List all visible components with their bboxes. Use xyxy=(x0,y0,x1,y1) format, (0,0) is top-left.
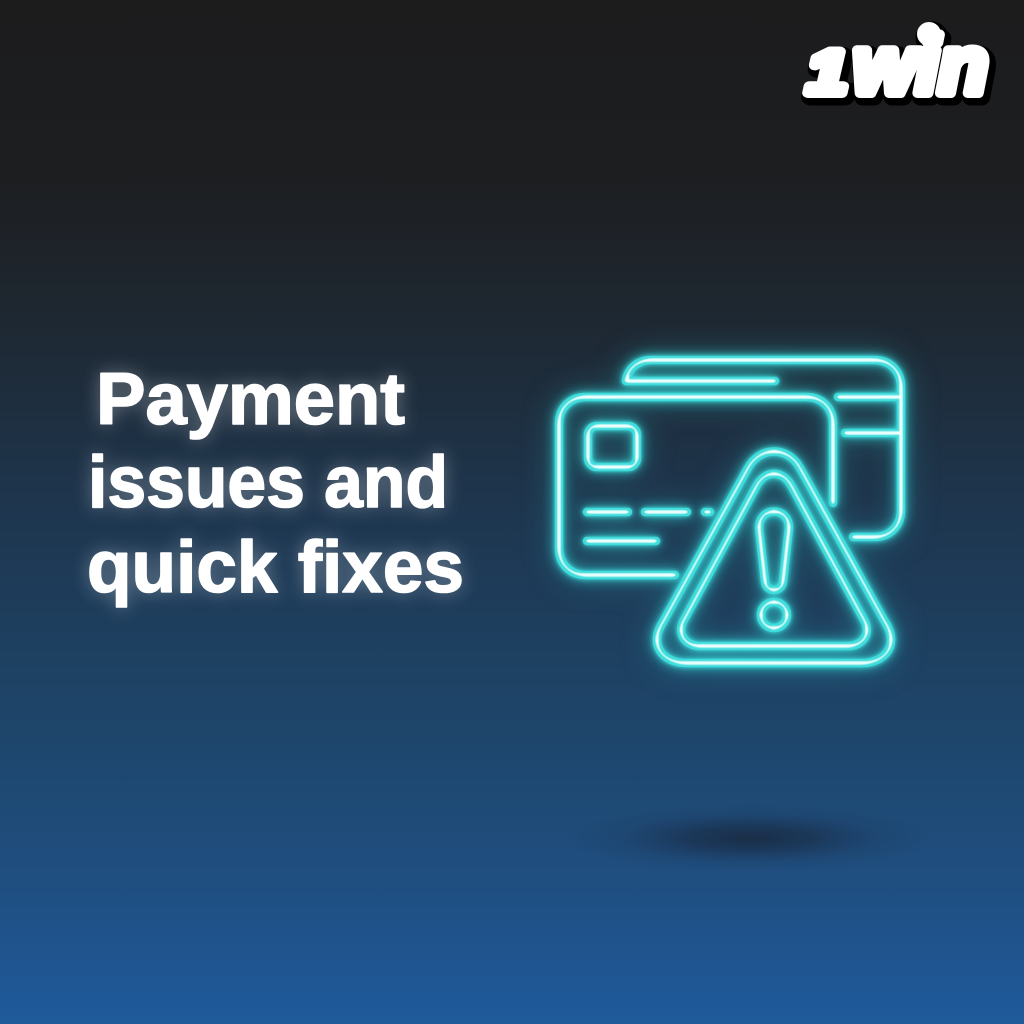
icon: front credit card xyxy=(559,397,833,575)
logo: 1win: win xyxy=(853,21,988,111)
title: Payment issues and quick fixes: quick fixes xyxy=(87,527,464,608)
title: Payment issues and quick fixes: Payment xyxy=(96,359,405,440)
icon: exclamation mark xyxy=(759,512,789,628)
floor shadow below icon xyxy=(565,804,935,872)
logo: 1win: win xyxy=(856,25,991,115)
title: Payment issues and quick fixes xyxy=(87,359,464,608)
logo: 1win: 1 xyxy=(810,43,850,110)
card number dashes xyxy=(587,512,710,541)
icon: back credit card xyxy=(626,360,901,537)
icon: warning triangle xyxy=(657,452,891,663)
icon: card chip xyxy=(588,426,637,467)
title: Payment issues and quick fixes: issues and xyxy=(88,442,448,523)
logo: 1win: 1 xyxy=(807,39,847,106)
icon: neon credit cards with warning triangle xyxy=(559,360,901,663)
